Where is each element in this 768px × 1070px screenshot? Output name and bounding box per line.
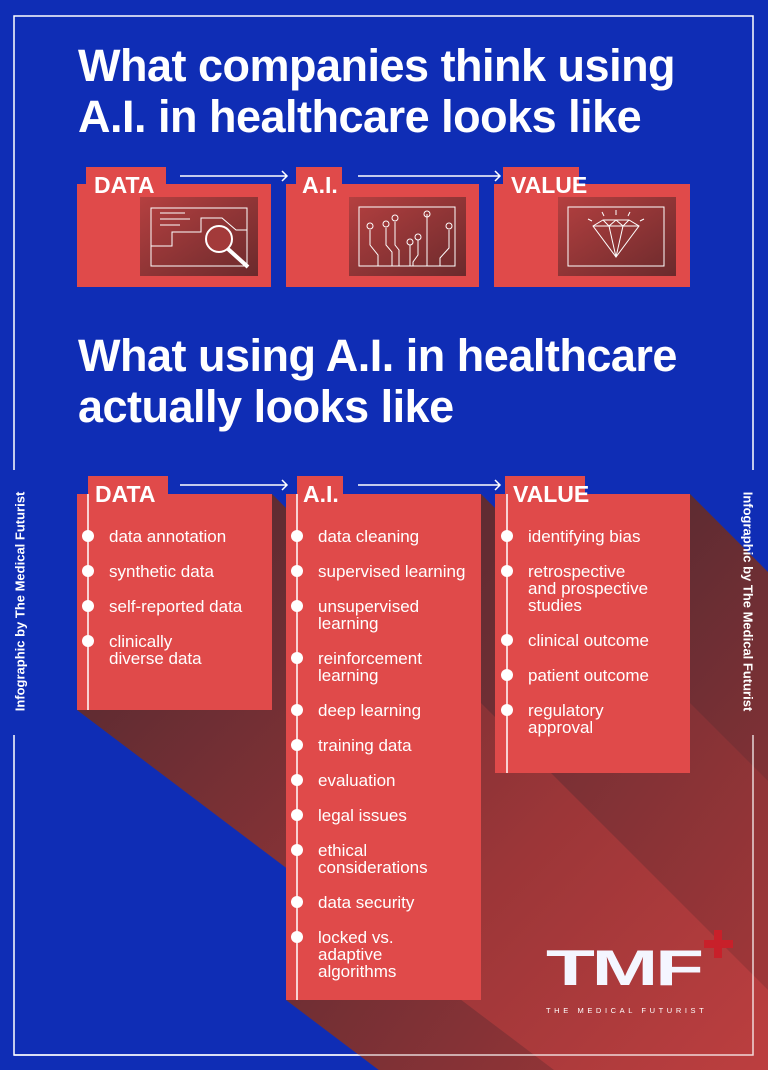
side text right: Infographic by The Medical Futurist [740, 492, 756, 711]
icon data [140, 197, 258, 276]
list ai: locked vs. [318, 928, 394, 947]
list data: clinically [109, 632, 172, 651]
list ai: legal issues [318, 806, 407, 825]
title 1 [78, 40, 675, 142]
list ai: data cleaning [318, 527, 419, 546]
list ai: ethical [318, 841, 367, 860]
list data [82, 527, 242, 668]
shadows [495, 494, 768, 1070]
logo cross [704, 930, 733, 958]
list ai: learning [318, 614, 378, 633]
list ai: adaptive [318, 945, 382, 964]
list ai: considerations [318, 858, 428, 877]
title 2 [78, 330, 677, 432]
icon value [558, 197, 676, 276]
top tabs: DATA [94, 172, 154, 198]
text: VALUE [511, 172, 587, 198]
list ai: learning [318, 666, 378, 685]
list value [501, 527, 649, 737]
list value: identifying bias [528, 527, 640, 546]
text: A.I. [302, 172, 338, 198]
list value: clinical outcome [528, 631, 649, 650]
list ai: evaluation [318, 771, 396, 790]
list data: data annotation [109, 527, 226, 546]
icon ai [349, 197, 466, 276]
title 1: What companies think using [78, 40, 675, 91]
list ai [291, 527, 465, 981]
list ai: algorithms [318, 962, 396, 981]
list value: approval [528, 718, 593, 737]
list value: studies [528, 596, 582, 615]
list ai: unsupervised [318, 597, 419, 616]
list value: patient outcome [528, 666, 649, 685]
text: A.I. [303, 481, 339, 507]
list data: diverse data [109, 649, 202, 668]
title 1: A.I. in healthcare looks like [78, 91, 641, 142]
list data: synthetic data [109, 562, 214, 581]
side text left: Infographic by The Medical Futurist [12, 492, 28, 711]
list ai: data security [318, 893, 414, 912]
list data: self-reported data [109, 597, 242, 616]
list ai: reinforcement [318, 649, 422, 668]
title 2: What using A.I. in healthcare [78, 330, 677, 381]
logo: THE MEDICAL FUTURIST [546, 1006, 707, 1015]
list ai: supervised learning [318, 562, 465, 581]
list value: regulatory [528, 701, 604, 720]
arrows [180, 171, 500, 181]
title 2: actually looks like [78, 381, 454, 432]
top panels [86, 167, 166, 187]
bottom tabs: DATA [95, 481, 155, 507]
list value: retrospective [528, 562, 625, 581]
list value: and prospective [528, 579, 648, 598]
bottom panels [88, 476, 168, 496]
list ai: deep learning [318, 701, 421, 720]
list ai: training data [318, 736, 412, 755]
logo: TMF [546, 940, 701, 996]
text: VALUE [513, 481, 589, 507]
